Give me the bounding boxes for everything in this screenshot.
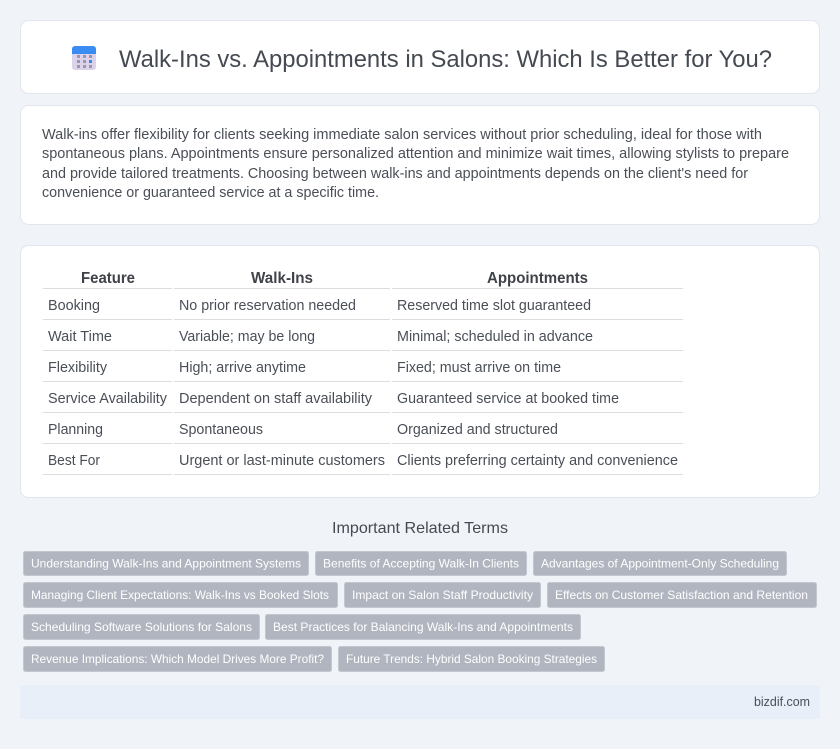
- row: flexibility: Fixed; must arrive on time: [397, 360, 561, 376]
- tag: [548, 582, 816, 608]
- tag: Revenue Implications: Which Model Drives More Profit?: [31, 652, 324, 666]
- tag: Best Practices for Balancing Walk-Ins and Appointments: [273, 620, 573, 634]
- table header: Feature: [81, 270, 135, 287]
- row: planning: Spontaneous: [179, 422, 263, 438]
- intro text: spontaneous plans. Appointments ensure personalized attention and minimize wait times, allowing stylists to prepare: [42, 146, 789, 162]
- footer: bizdif.com: [754, 695, 810, 709]
- tag: [24, 646, 332, 672]
- intro text: convenience or guaranteed service at a specific time.: [42, 185, 379, 201]
- row: service availability: Dependent on staff availability: [179, 391, 373, 407]
- tag: Future Trends: Hybrid Salon Booking Strategies: [346, 652, 597, 666]
- row: wait time: Minimal; scheduled in advance: [397, 329, 593, 345]
- row: best for: Best For: [48, 453, 100, 469]
- row: best for: Urgent or last-minute customers: [179, 453, 385, 469]
- row: flexibility: Flexibility: [48, 360, 108, 376]
- table header: Appointments: [487, 270, 588, 287]
- panel: introduction: [20, 106, 820, 224]
- tag: [534, 552, 786, 576]
- title: Walk-Ins vs. Appointments in Salons: Which Is Better for You?: [119, 46, 772, 73]
- panel: comparison table: [20, 246, 820, 498]
- tag: [316, 552, 526, 576]
- row: flexibility: [48, 360, 561, 376]
- tag: Advantages of Appointment-Only Scheduling: [541, 556, 779, 570]
- row: booking: Reserved time slot guaranteed: [397, 298, 591, 314]
- row: planning: Organized and structured: [397, 422, 558, 438]
- row: planning: Planning: [48, 422, 103, 438]
- row: wait time: [48, 329, 593, 345]
- tag: [24, 614, 260, 640]
- row: booking: [48, 298, 591, 314]
- row: flexibility: High; arrive anytime: [179, 360, 306, 376]
- row: wait time: Variable; may be long: [179, 329, 315, 345]
- tag: Scheduling Software Solutions for Salons: [31, 620, 252, 634]
- footer: [20, 685, 820, 719]
- row: wait time: Wait Time: [48, 329, 112, 345]
- tag: [266, 614, 580, 640]
- row: planning: [48, 422, 558, 438]
- tag: [24, 582, 338, 608]
- row: best for: Clients preferring certainty and convenience: [397, 453, 678, 469]
- row: best for: [48, 453, 678, 469]
- panel: header: [20, 20, 820, 94]
- tag: [338, 646, 604, 672]
- tag: Understanding Walk-Ins and Appointment Systems: [31, 556, 301, 570]
- row: booking: Booking: [48, 298, 100, 314]
- table header: Walk-Ins: [251, 270, 313, 287]
- tag: Impact on Salon Staff Productivity: [352, 588, 533, 602]
- tag: Managing Client Expectations: Walk-Ins vs Booked Slots: [31, 588, 329, 602]
- intro text: Walk-ins offer flexibility for clients seeking immediate salon services without prior scheduling, ideal for those with: [42, 127, 762, 143]
- heading: important related terms: Important Related Terms: [332, 520, 508, 537]
- row: service availability: Service Availability: [48, 391, 168, 407]
- row: service availability: [48, 391, 619, 407]
- tag: Effects on Customer Satisfaction and Retention: [555, 588, 808, 602]
- intro text: [42, 127, 789, 201]
- row: service availability: Guaranteed service at booked time: [397, 391, 619, 407]
- tag: [24, 552, 308, 576]
- tag: [344, 582, 540, 608]
- related term tags: [24, 552, 816, 672]
- icon: calendar: [72, 46, 96, 70]
- table header: [81, 270, 588, 287]
- intro text: and provide tailored treatments. Choosing between walk-ins and appointments depends on the client's need for: [42, 166, 748, 182]
- tag: Benefits of Accepting Walk-In Clients: [323, 556, 519, 570]
- row: booking: No prior reservation needed: [179, 298, 356, 314]
